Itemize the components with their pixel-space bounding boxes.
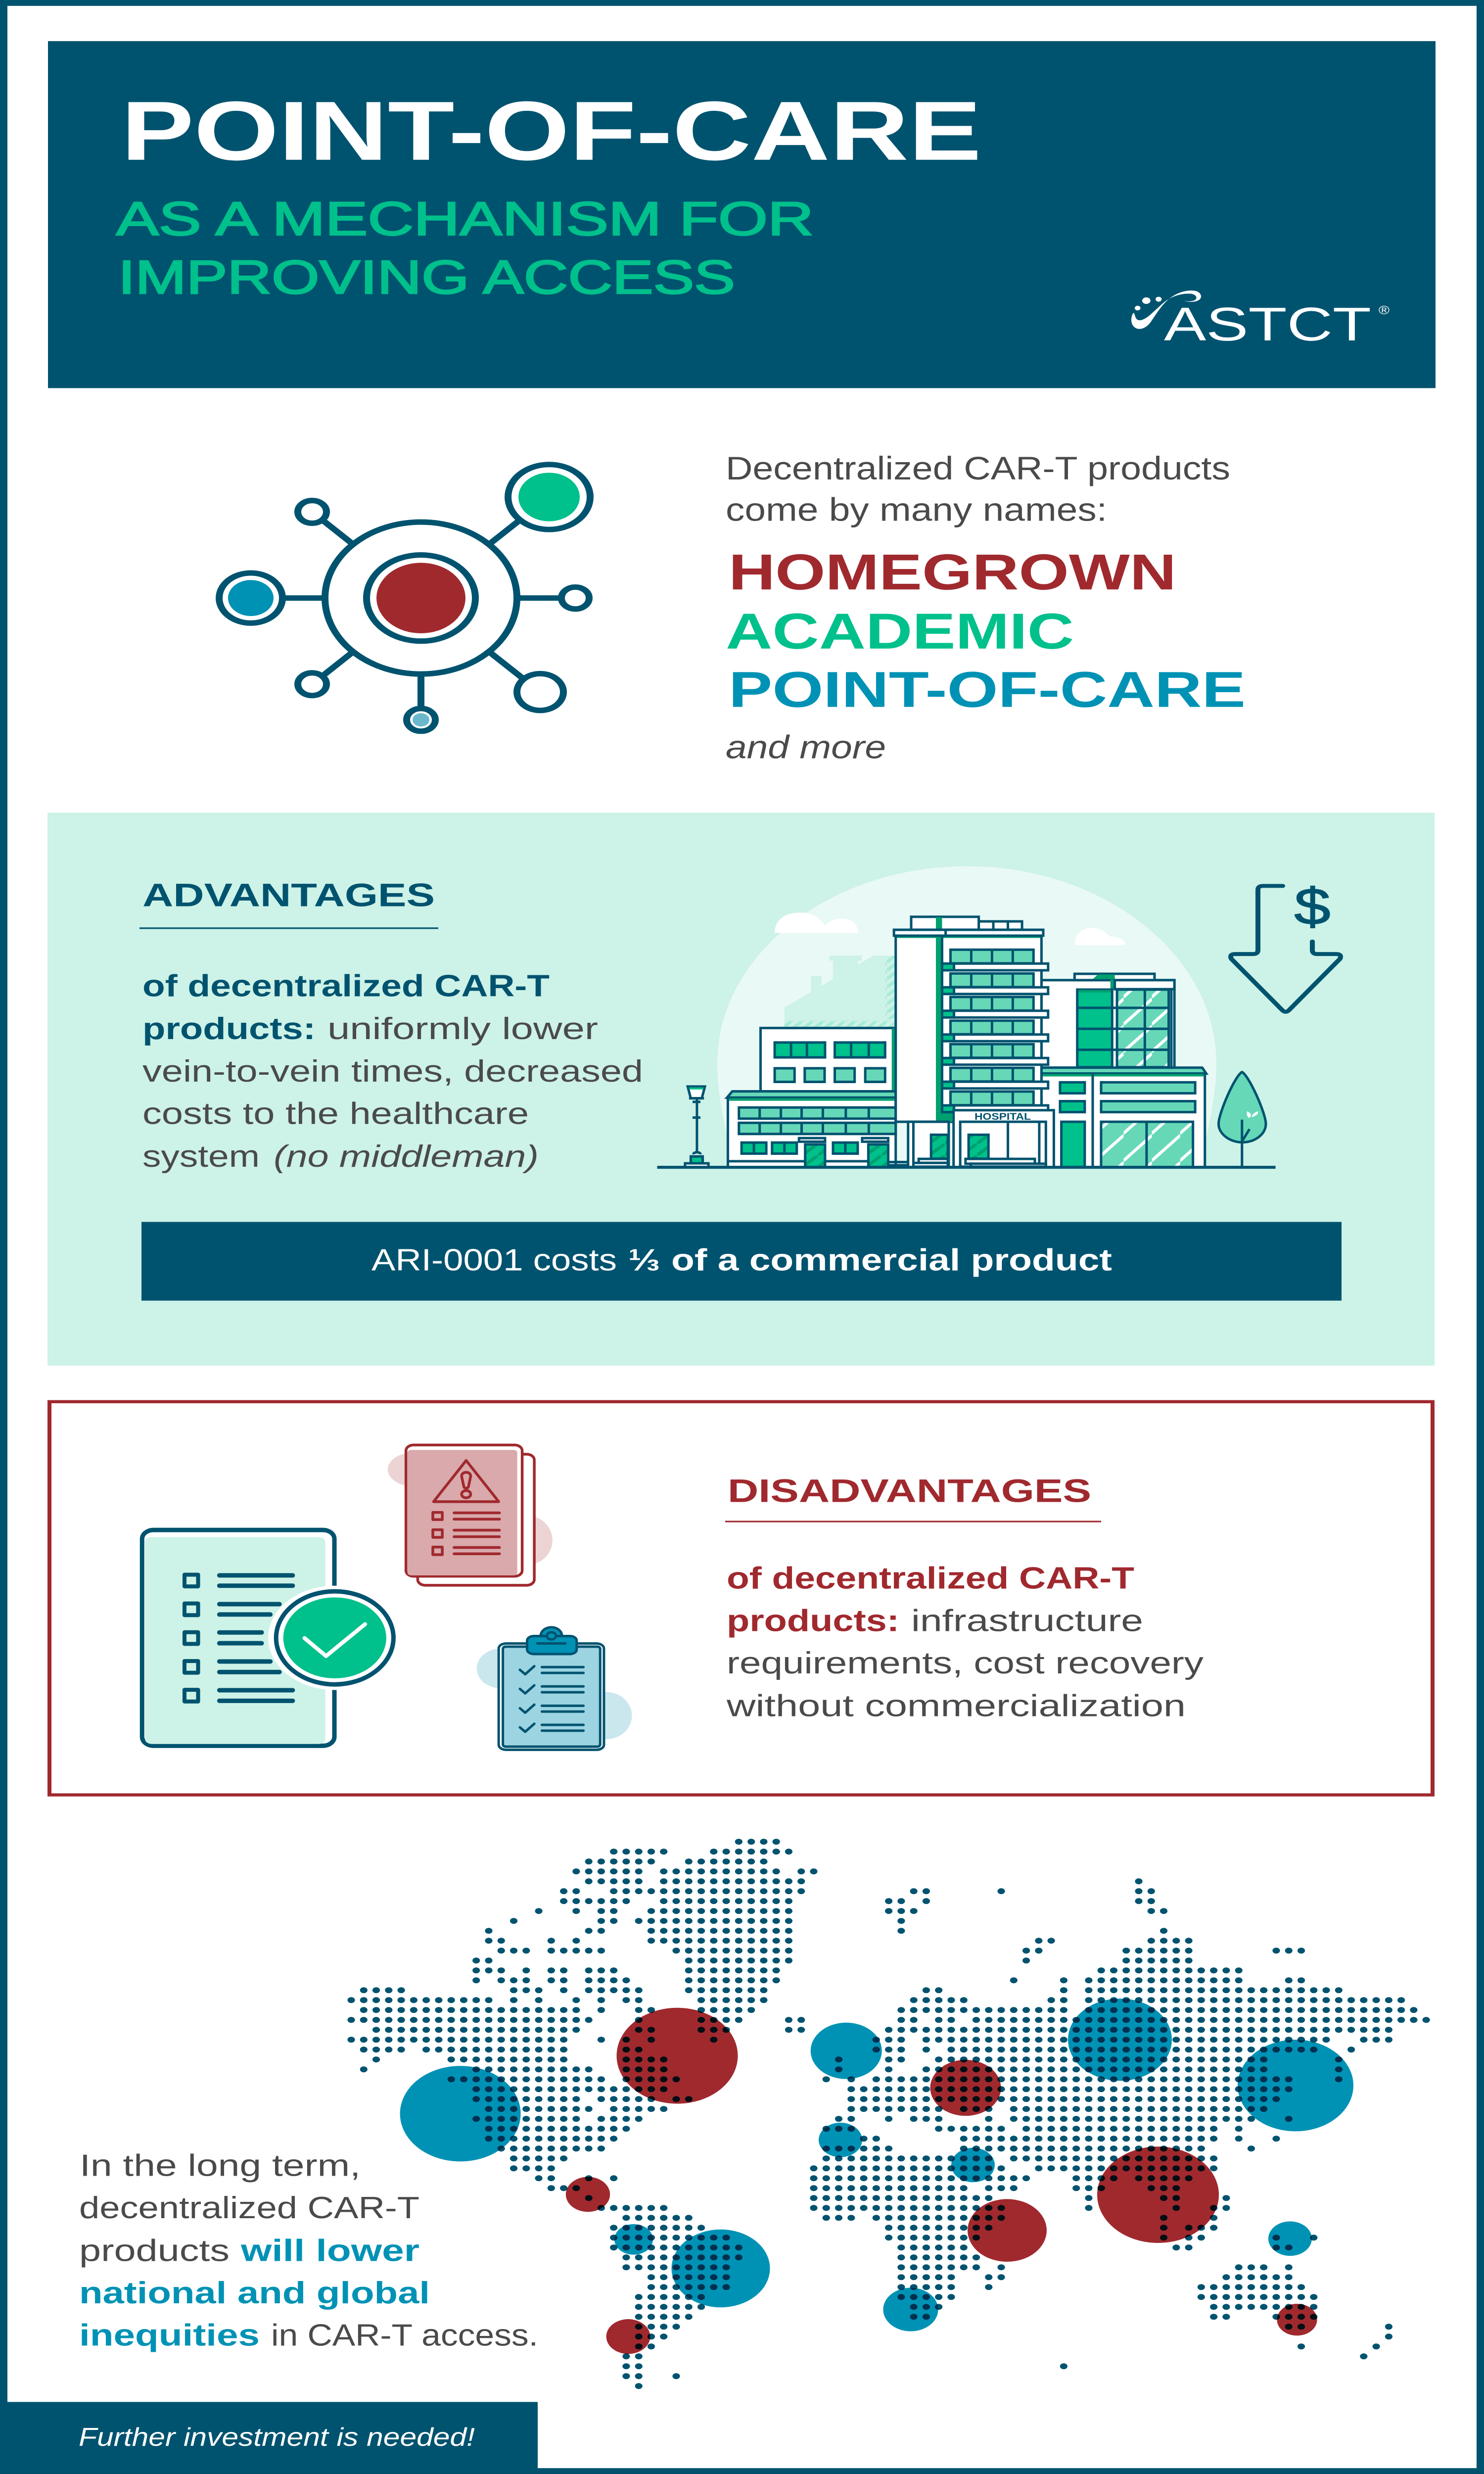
- text block: long term: decentralized CAR-T: [79, 2190, 419, 2225]
- subtitle: [116, 192, 814, 304]
- right block: [1041, 974, 1206, 1168]
- dome backdrop: [717, 866, 1216, 1166]
- text block: advantages body: products:: [142, 1011, 316, 1046]
- text block: many names: HOMEGROWN: [729, 544, 1176, 600]
- logo: ASTCT: ®: [1379, 304, 1390, 317]
- text block: long term: will lower: [240, 2233, 419, 2268]
- text block: many names: come by many names:: [726, 491, 1107, 528]
- text block: disadvantages body: of decentralized CAR-T: [727, 1561, 1134, 1595]
- ground line: [657, 1166, 1276, 1169]
- subtitle: AS A MECHANISM FOR: [116, 192, 814, 245]
- tree: [1218, 1072, 1266, 1168]
- bubbles: red regions: [566, 2008, 1317, 2354]
- text block: disadvantages body: without commercialization: [726, 1688, 1186, 1723]
- heading: disadvantages: DISADVANTAGES: [728, 1473, 1091, 1509]
- text block: disadvantages body: products:: [727, 1603, 899, 1638]
- title: POINT-OF-CARE: [121, 84, 981, 178]
- panel: header: [48, 41, 1436, 388]
- text block: many names: ACADEMIC: [726, 603, 1074, 660]
- icon: clipboard: [477, 1627, 632, 1750]
- text block: many names: POINT-OF-CARE: [729, 662, 1246, 718]
- main tower: [894, 917, 1043, 1122]
- text block: advantages body: uniformly lower: [327, 1011, 598, 1046]
- heading: advantages: ADVANTAGES: [142, 877, 435, 913]
- icon: checklist with check badge: [142, 1530, 401, 1746]
- text block: disadvantages body: infrastructure: [911, 1603, 1143, 1638]
- heading: disadvantages: [725, 1473, 1101, 1522]
- callout: ARI-0001 cost: of a commercial product: [671, 1243, 1112, 1277]
- clouds: [775, 912, 1125, 945]
- icon: warning document: [388, 1445, 553, 1585]
- text block: advantages body: of decentralized CAR-T: [142, 968, 550, 1003]
- text block: disadvantages body: requirements, cost recovery: [727, 1646, 1204, 1680]
- chart: dotted world map: [351, 1842, 1426, 2386]
- icon: falling cost arrow: $: [1294, 878, 1331, 936]
- hospital sign: HOSPITAL: [974, 1111, 1031, 1122]
- illustration: hospital: [657, 866, 1276, 1168]
- callout: further investment: [0, 2402, 538, 2474]
- subtitle: IMPROVING ACCESS: [118, 251, 735, 304]
- callout: ARI-0001 cost: ARI-0001 costs: [371, 1243, 617, 1277]
- text block: advantages body: system: [142, 1139, 260, 1173]
- map dots: [351, 1842, 1426, 2386]
- street lamp: [685, 1087, 708, 1168]
- text block: long term: inequities: [79, 2318, 260, 2352]
- logo: ASTCT: [1131, 290, 1390, 351]
- text block: long term: in CAR-T access.: [271, 2318, 538, 2352]
- text block: disadvantages body: [726, 1561, 1204, 1723]
- background building silhouette: [785, 955, 895, 1027]
- panel: disadvantages: [49, 1402, 1433, 1795]
- text block: long term: products: [79, 2233, 230, 2268]
- text block: many names: and more: [726, 729, 886, 765]
- tower floors: [942, 950, 1048, 1112]
- text block: advantages body: vein-to-vein times, decreased: [142, 1054, 643, 1088]
- heading: advantages: [139, 877, 438, 929]
- icon: cell network: [219, 465, 590, 731]
- callout: ARI-0001 cost: [141, 1222, 1342, 1301]
- text block: advantages body: costs to the healthcare: [142, 1096, 529, 1131]
- text block: advantages body: [142, 968, 643, 1173]
- entrance blocks: [908, 1110, 1054, 1168]
- icon: falling cost arrow: [1231, 878, 1341, 1012]
- text block: long term: national and global: [79, 2276, 430, 2310]
- text block: long term: In the long term,: [80, 2148, 361, 2183]
- logo: ASTCT: ASTCT: [1164, 298, 1371, 351]
- text block: advantages body: (no middleman): [274, 1139, 539, 1173]
- callout: ARI-0001 cost: ⅓: [628, 1243, 660, 1277]
- callout: further investment: Further investment is needed!: [79, 2423, 475, 2451]
- text block: long term: [79, 2148, 538, 2352]
- bubbles: blue regions: [400, 1998, 1353, 2331]
- left block: [727, 1028, 908, 1168]
- text block: many names: Decentralized CAR-T products: [726, 450, 1230, 486]
- illustration: documents: [142, 1445, 632, 1750]
- text block: many names: [726, 450, 1246, 765]
- panel: advantages: [47, 812, 1435, 1366]
